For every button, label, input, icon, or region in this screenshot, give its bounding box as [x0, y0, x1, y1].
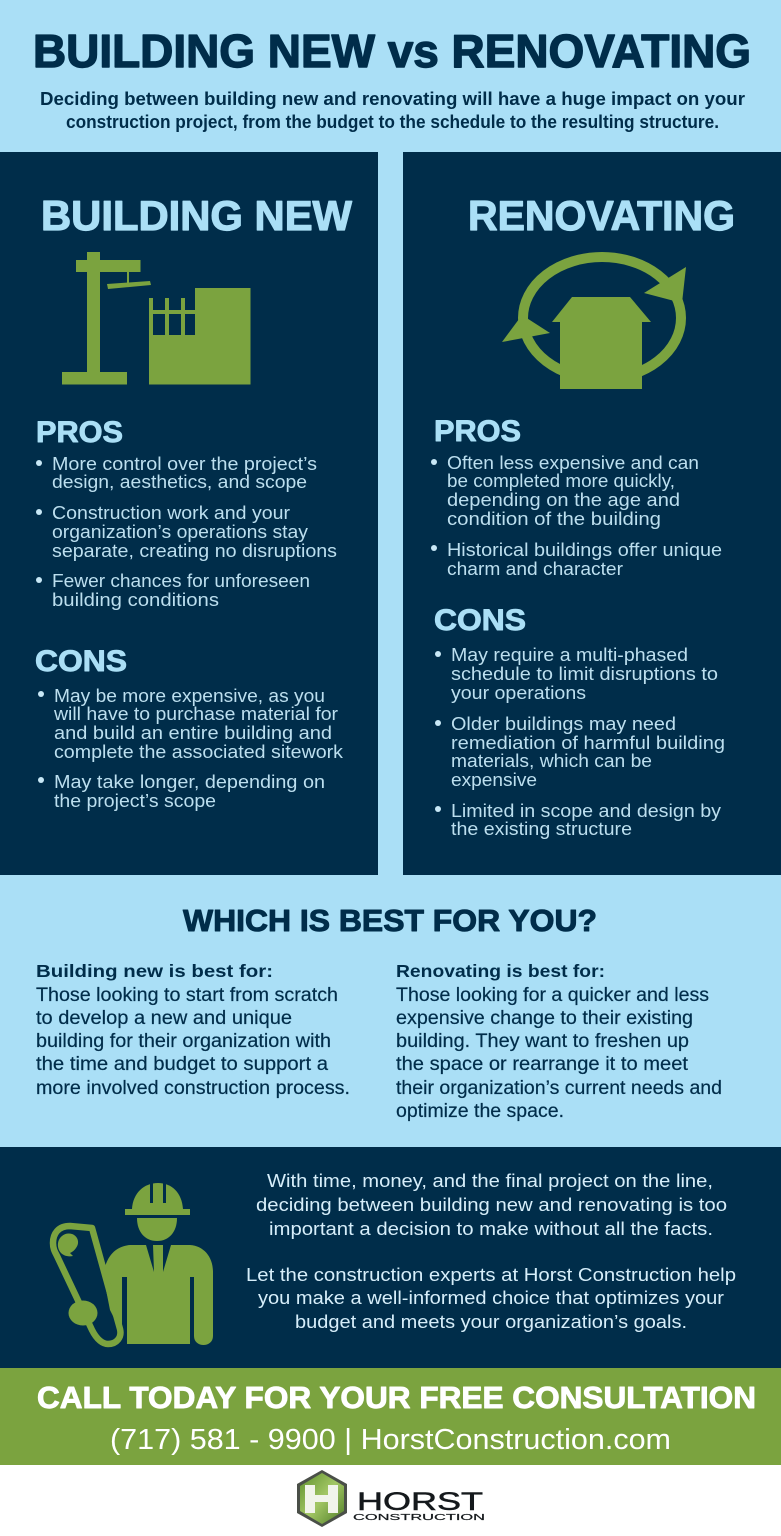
logo wordmark: CONSTRUCTION: [353, 1512, 485, 1522]
pros list: design, aesthetics, and scope: [52, 472, 307, 492]
section heading: WHICH IS BEST FOR YOU?: [183, 903, 597, 938]
icon: construction worker with blueprints: [53, 1183, 213, 1345]
header: [33, 25, 751, 132]
column: building new is best for: building for their organization with: [36, 1031, 331, 1052]
logo mark: [297, 1470, 347, 1527]
cons list: schedule to limit disruptions to: [451, 664, 718, 684]
closing text: deciding between building new and renovating is too: [256, 1194, 727, 1215]
pros list: condition of the building: [447, 509, 661, 529]
panel: building new: [0, 152, 378, 875]
pros list: be completed more quickly,: [447, 471, 675, 491]
cons list: Older buildings may need: [451, 714, 676, 734]
cons list: May be more expensive, as you: [54, 686, 325, 706]
column: renovating is best for: building. They want to freshen up: [396, 1031, 689, 1052]
panel: closing message: [0, 1147, 781, 1368]
logo wordmark: [353, 1488, 485, 1522]
column: renovating is best for: the space or rearrange it to meet: [396, 1054, 689, 1075]
cons heading: CONS: [434, 604, 526, 637]
column: renovating is best for: [396, 961, 722, 1122]
pros list: Historical buildings offer unique: [447, 540, 722, 560]
pros list: separate, creating no disruptions: [52, 541, 337, 561]
cons list: May take longer, depending on: [54, 772, 325, 792]
pros list: [36, 454, 337, 610]
closing text: Let the construction experts at Horst Construction help: [246, 1264, 736, 1285]
intro text: Deciding between building new and renovating will have a huge impact on your: [40, 89, 745, 109]
contact details: (717) 581 - 9900 | HorstConstruction.com: [110, 1424, 671, 1456]
intro text: [40, 89, 745, 132]
column: renovating is best for: optimize the space.: [396, 1101, 564, 1122]
icon: house with circular arrows: [502, 257, 686, 389]
closing text: With time, money, and the final project on the line,: [267, 1170, 713, 1191]
heading: renovating: RENOVATING: [468, 192, 735, 239]
pros heading: PROS: [434, 415, 521, 448]
closing text: important a decision to make without all the facts.: [269, 1218, 713, 1239]
column: building new is best for: Those looking to start from scratch: [36, 985, 338, 1006]
logo wordmark: HORST: [357, 1488, 483, 1516]
cons list: the existing structure: [451, 819, 632, 839]
panel: renovating: [403, 152, 781, 875]
cons heading: CONS: [35, 645, 127, 678]
icon: crane and building: [62, 252, 250, 384]
column: building new is best for: to develop a new and unique: [36, 1008, 292, 1029]
column: renovating is best for: Renovating is best for:: [396, 961, 605, 981]
cons list: will have to purchase material for: [53, 704, 338, 724]
column: building new is best for: the time and budget to support a: [36, 1054, 328, 1075]
cons list: complete the associated sitework: [54, 742, 344, 762]
pros list: depending on the age and: [447, 490, 680, 510]
cons list: [38, 686, 344, 811]
column: building new is best for: more involved construction process.: [36, 1078, 350, 1099]
cons list: Limited in scope and design by: [451, 801, 721, 821]
cons list: materials, which can be: [451, 751, 652, 771]
cons list: your operations: [451, 683, 586, 703]
call to action heading: CALL TODAY FOR YOUR FREE CONSULTATION: [37, 1380, 756, 1415]
pros list: Fewer chances for unforeseen: [52, 571, 310, 591]
column: building new is best for: Building new is best for:: [36, 961, 273, 981]
column: renovating is best for: their organization’s current needs and: [396, 1078, 722, 1099]
pros list: charm and character: [447, 559, 623, 579]
cons list: expensive: [451, 770, 537, 790]
closing text: you make a well-informed choice that optimizes your: [258, 1287, 724, 1308]
column: renovating is best for: Those looking for a quicker and less: [396, 985, 709, 1006]
pros list: Construction work and your: [52, 503, 290, 523]
cons list: remediation of harmful building: [451, 733, 725, 753]
section: which is best for you: [36, 903, 722, 1122]
closing text: [246, 1170, 736, 1332]
cons list: May require a multi-phased: [451, 645, 688, 665]
pros list: building conditions: [52, 590, 219, 610]
cons list: and build an entire building and: [54, 723, 332, 743]
closing text: budget and meets your organization’s goals.: [295, 1311, 687, 1332]
intro text: construction project, from the budget to the schedule to the resulting structure.: [66, 112, 719, 132]
pros list: More control over the project’s: [52, 454, 317, 474]
pros list: organization’s operations stay: [52, 522, 308, 542]
title: BUILDING NEW vs RENOVATING: [33, 25, 751, 77]
heading: building new: BUILDING NEW: [41, 192, 352, 239]
column: building new is best for: [36, 961, 350, 1099]
column: renovating is best for: expensive change to their existing: [396, 1008, 693, 1029]
pros list: Often less expensive and can: [447, 453, 699, 473]
footer logo: [0, 1465, 781, 1536]
cons list: the project’s scope: [54, 791, 216, 811]
pros heading: PROS: [36, 416, 123, 449]
cons list: [435, 645, 725, 839]
call to action band: [0, 1368, 781, 1465]
pros list: [431, 453, 722, 579]
